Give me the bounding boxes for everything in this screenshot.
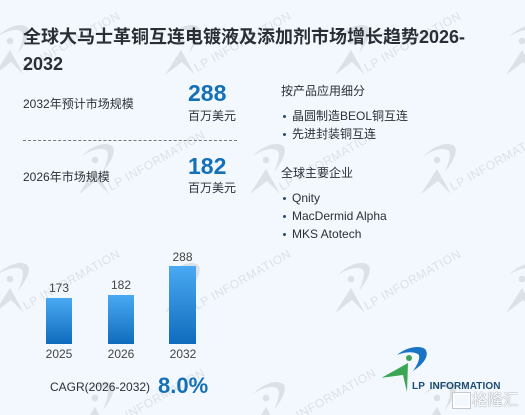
- list item: Qnity: Qnity: [292, 191, 320, 205]
- watermark logos: LP INFORMATION: [106, 128, 208, 194]
- panel: key companies: [281, 166, 387, 241]
- icon: LP Information logo: LP INFORMATION: [412, 381, 501, 392]
- brand name: 格隆汇: [472, 392, 519, 409]
- value: 182: 182: [188, 153, 226, 179]
- heading: companies: 全球主要企业: [281, 166, 353, 180]
- value 173: 173: [49, 281, 69, 295]
- list item: MKS Atotech: MKS Atotech: [292, 227, 361, 241]
- heading: segments: 按产品应用细分: [281, 84, 365, 98]
- list item: BEOL: 晶圆制造BEOL铜互连: [292, 109, 408, 123]
- watermark logos: LP INFORMATION: [277, 128, 379, 194]
- bar 2025: [46, 298, 72, 344]
- value 182: 182: [111, 278, 131, 292]
- watermark logos: LP INFORMATION: [192, 9, 294, 75]
- year 2026: 2026: [108, 347, 134, 361]
- CAGR value: 8.0%: [158, 373, 208, 398]
- unit: million USD: 百万美元: [188, 109, 236, 123]
- watermark logos: LP INFORMATION: [21, 247, 123, 313]
- icon: G mark: [453, 393, 470, 408]
- metric: 2032 market size: [23, 80, 236, 123]
- label: 2026 market size: 2026年市场规模: [23, 170, 110, 184]
- dashed divider: [23, 140, 237, 141]
- value: 288: 288: [188, 80, 226, 106]
- list item: MacDermid Alpha: MacDermid Alpha: [292, 209, 387, 223]
- watermark logos: LP INFORMATION: [192, 247, 294, 313]
- watermark logos: LP INFORMATION: [21, 9, 123, 75]
- year 2032: 2032: [170, 347, 196, 361]
- list item: packaging: 先进封装铜互连: [292, 127, 376, 141]
- watermark: Gelonghui: [452, 391, 519, 409]
- unit: million USD: 百万美元: [188, 181, 236, 195]
- label: 2032 forecast: 2032年预计市场规模: [23, 97, 134, 111]
- CAGR callout: [50, 373, 208, 398]
- title: 全球大马士革铜互连电镀液及添加剂市场增长趋势2026-2032: [23, 27, 465, 74]
- metric: 2026 market size: [23, 153, 236, 195]
- CAGR label: CAGR(2026-2032): [50, 380, 150, 394]
- year 2025: 2025: [46, 347, 72, 361]
- watermark logos: LP INFORMATION: [362, 9, 464, 75]
- bar 2032: [169, 266, 196, 344]
- icon: LP Information logo: [382, 347, 501, 392]
- watermark logos: LP INFORMATION: [362, 247, 464, 313]
- bar chart: [46, 250, 196, 361]
- bar 2026: [108, 295, 134, 344]
- panel: product application segments: [281, 84, 408, 141]
- value 288: 288: [172, 250, 193, 264]
